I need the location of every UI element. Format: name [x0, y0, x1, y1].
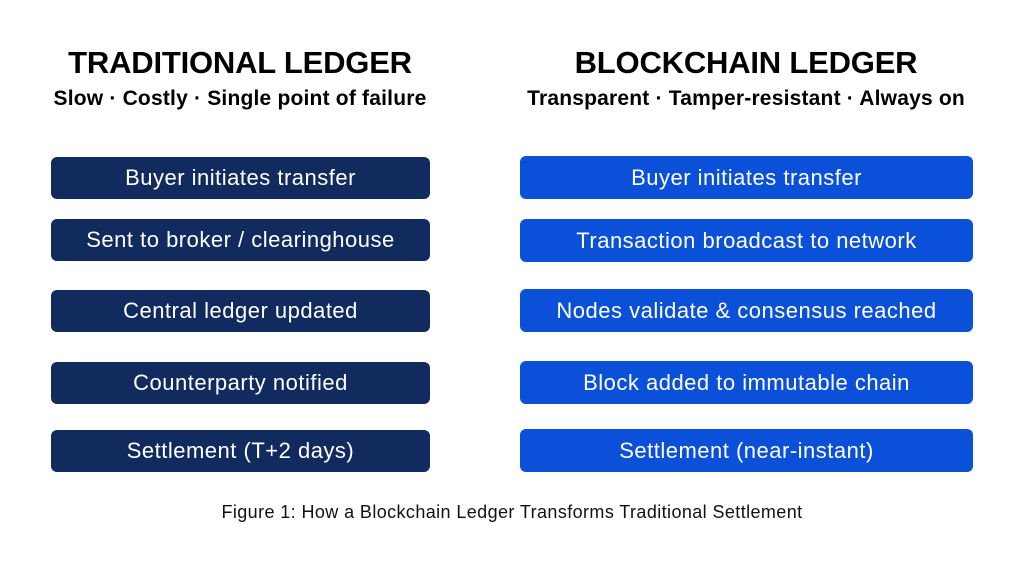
step 2: Transaction broadcast to network — [576, 228, 917, 252]
panel: traditional steps — [51, 157, 430, 472]
step 3 — [520, 289, 973, 332]
step 4: Counterparty notified — [133, 370, 348, 395]
step 4 — [51, 362, 430, 404]
step 5: Settlement (T+2 days) — [127, 438, 354, 463]
caption: Figure 1: How a Blockchain Ledger Transforms Traditional Settlement — [221, 502, 803, 522]
step 1 — [51, 157, 430, 199]
step 2 — [520, 219, 973, 262]
step 3: Central ledger updated — [123, 298, 358, 323]
step 4 — [520, 361, 973, 404]
title: traditional ledger: TRADITIONAL LEDGER — [68, 45, 412, 80]
step 1 — [520, 156, 973, 199]
step 3 — [51, 290, 430, 332]
subtitle: traditional: Slow · Costly · Single point of failure — [54, 87, 426, 110]
step 2: Sent to broker / clearinghouse — [86, 227, 395, 252]
step 5 — [51, 430, 430, 472]
step 2 — [51, 219, 430, 261]
step 5: Settlement (near-instant) — [619, 438, 874, 462]
step 1: Buyer initiates transfer — [125, 165, 356, 190]
title: blockchain ledger: BLOCKCHAIN LEDGER — [575, 45, 917, 80]
step 5 — [520, 429, 973, 472]
panel: blockchain steps — [520, 156, 973, 472]
step 1: Buyer initiates transfer — [631, 164, 862, 190]
subtitle: blockchain: Transparent · Tamper-resistant · Always on — [527, 87, 965, 110]
step 4: Block added to immutable chain — [583, 370, 910, 394]
step 3: Nodes validate & consensus reached — [556, 298, 937, 322]
